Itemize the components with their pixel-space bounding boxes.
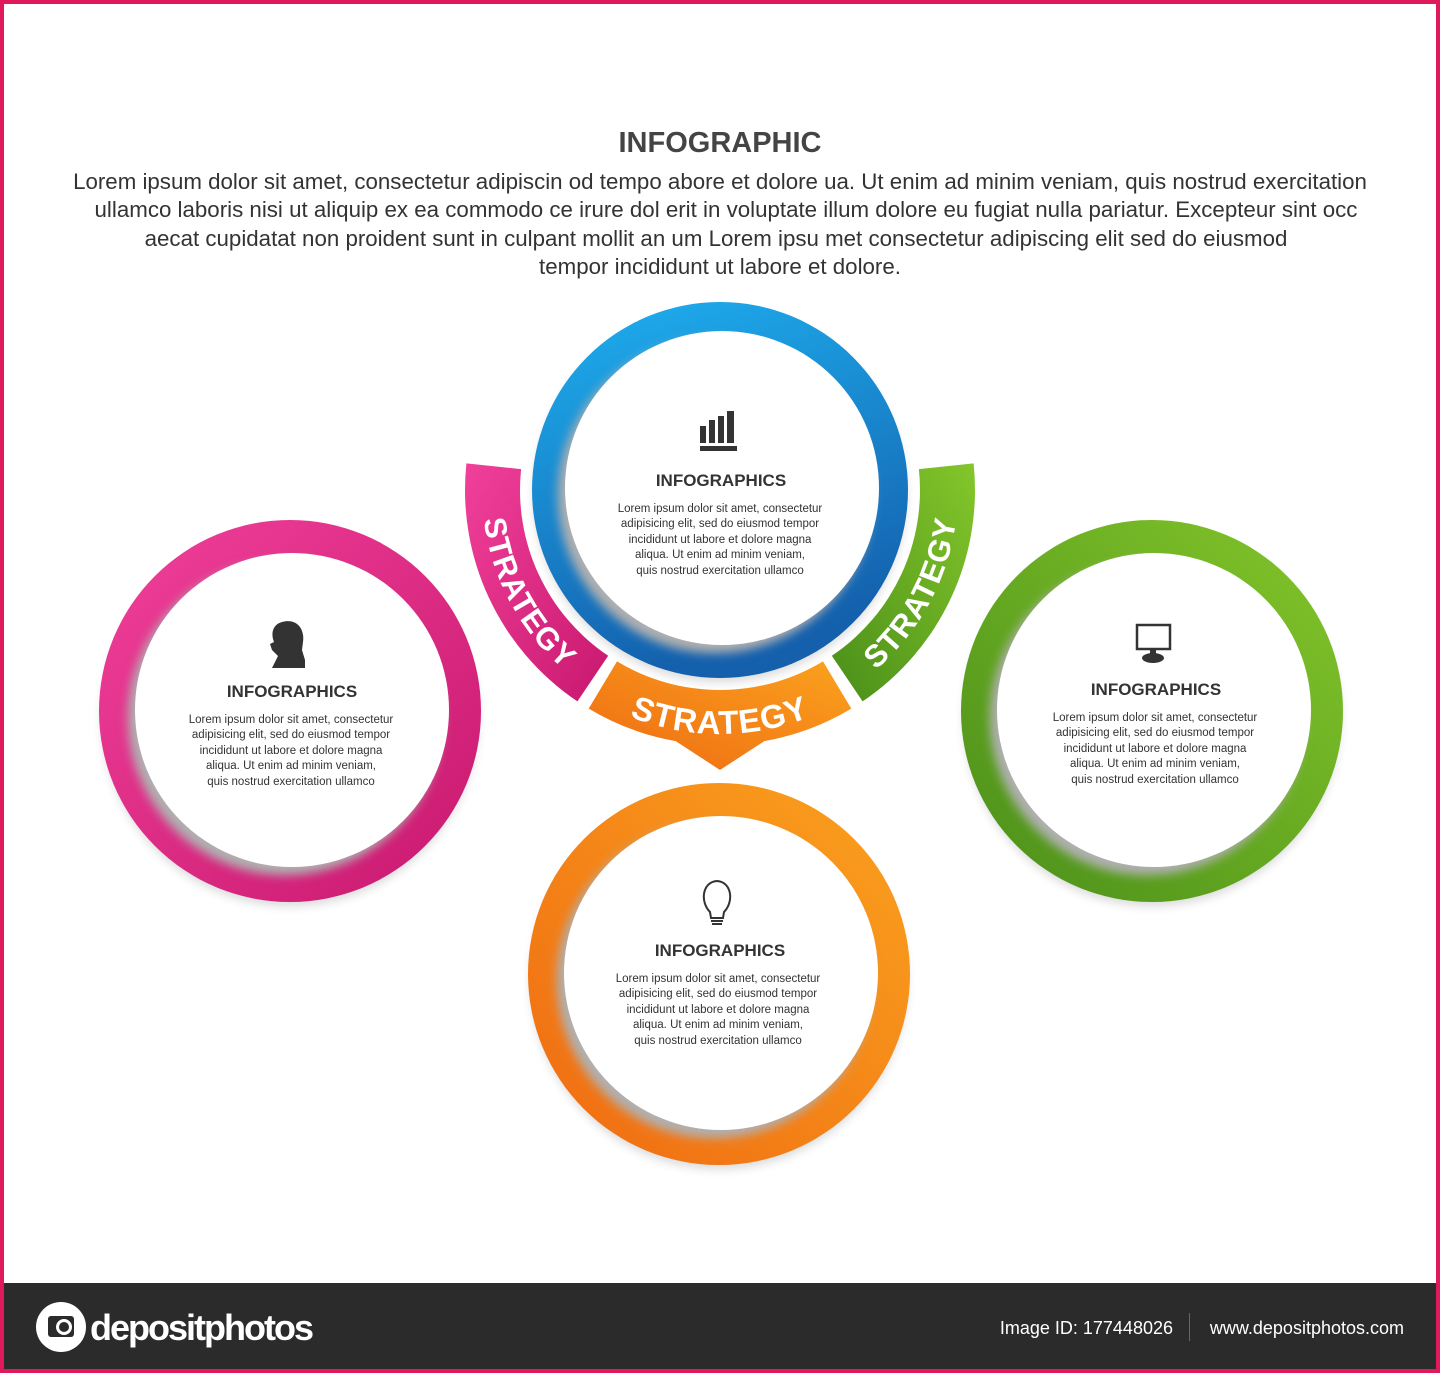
icon: light bulb [704,881,730,924]
body text: incididunt ut labore et dolore magna [200,745,383,757]
body text: aliqua. Ut enim ad minim veniam, [633,1019,803,1031]
body text: adipisicing elit, sed do eiusmod tempor [192,729,390,741]
banner: orange strategy: STRATEGY [632,696,802,734]
logo: depositphotos [90,1307,313,1348]
website: www.depositphotos.com [1209,1318,1404,1338]
icon: monitor [1137,625,1170,663]
body text: quis nostrud exercitation ullamco [634,1035,802,1047]
footer bar [4,1283,1436,1369]
circle: orange bottom [528,783,910,1169]
body text: incididunt ut labore et dolore magna [1064,743,1247,755]
heading: INFOGRAPHICS [227,682,357,701]
circle: green right [961,520,1343,906]
body text [618,503,822,577]
body text: Lorem ipsum dolor sit amet, consectetur [1053,712,1257,724]
body text: adipisicing elit, sed do eiusmod tempor [619,988,817,1000]
banner: pink strategy [465,463,608,702]
intro paragraph: Lorem ipsum dolor sit amet, consectetur adipiscin od tempo abore et dolore ua. Ut enim ad minim veniam, quis nostrud exercitation [73,169,1367,194]
heading: INFOGRAPHICS [656,471,786,490]
body text: aliqua. Ut enim ad minim veniam, [635,549,805,561]
intro paragraph [73,169,1367,279]
banner: orange strategy [588,661,852,770]
body text: aliqua. Ut enim ad minim veniam, [1070,758,1240,770]
body text: Lorem ipsum dolor sit amet, consectetur [616,973,820,985]
body text: adipisicing elit, sed do eiusmod tempor [621,518,819,530]
body text: incididunt ut labore et dolore magna [629,534,812,546]
logo [36,1302,313,1352]
body text: quis nostrud exercitation ullamco [207,776,375,788]
intro paragraph: ullamco laboris nisi ut aliquip ex ea commodo ce irure dol erit in voluptate illum dolore eu fugiat nulla pariatur. Excepteur sint occ [95,197,1357,222]
intro paragraph: aecat cupidatat non proident sunt in culpant mollit an um Lorem ipsu met consectetur adipiscing elit sed do eiusmod [145,226,1287,251]
icon: head [270,621,305,668]
body text: aliqua. Ut enim ad minim veniam, [206,760,376,772]
banner: green strategy [832,463,975,702]
body text: adipisicing elit, sed do eiusmod tempor [1056,727,1254,739]
body text: Lorem ipsum dolor sit amet, consectetur [618,503,822,515]
circle: pink left [99,520,481,906]
body text [1053,712,1257,786]
body text [189,714,393,788]
banner: green strategy: STRATEGY [864,517,955,667]
body text [616,973,820,1047]
heading: INFOGRAPHICS [1091,680,1221,699]
title: INFOGRAPHIC [618,127,822,159]
body text: quis nostrud exercitation ullamco [1071,774,1239,786]
body text: quis nostrud exercitation ullamco [636,565,804,577]
banner: pink strategy: STRATEGY [484,518,578,664]
heading: INFOGRAPHICS [655,941,785,960]
body text: Lorem ipsum dolor sit amet, consectetur [189,714,393,726]
body text: incididunt ut labore et dolore magna [627,1004,810,1016]
image id: Image ID: 177448026 [1000,1318,1173,1338]
icon: bar chart [700,411,737,451]
circle: blue top [532,302,908,682]
intro paragraph: tempor incididunt ut labore et dolore. [539,254,901,279]
